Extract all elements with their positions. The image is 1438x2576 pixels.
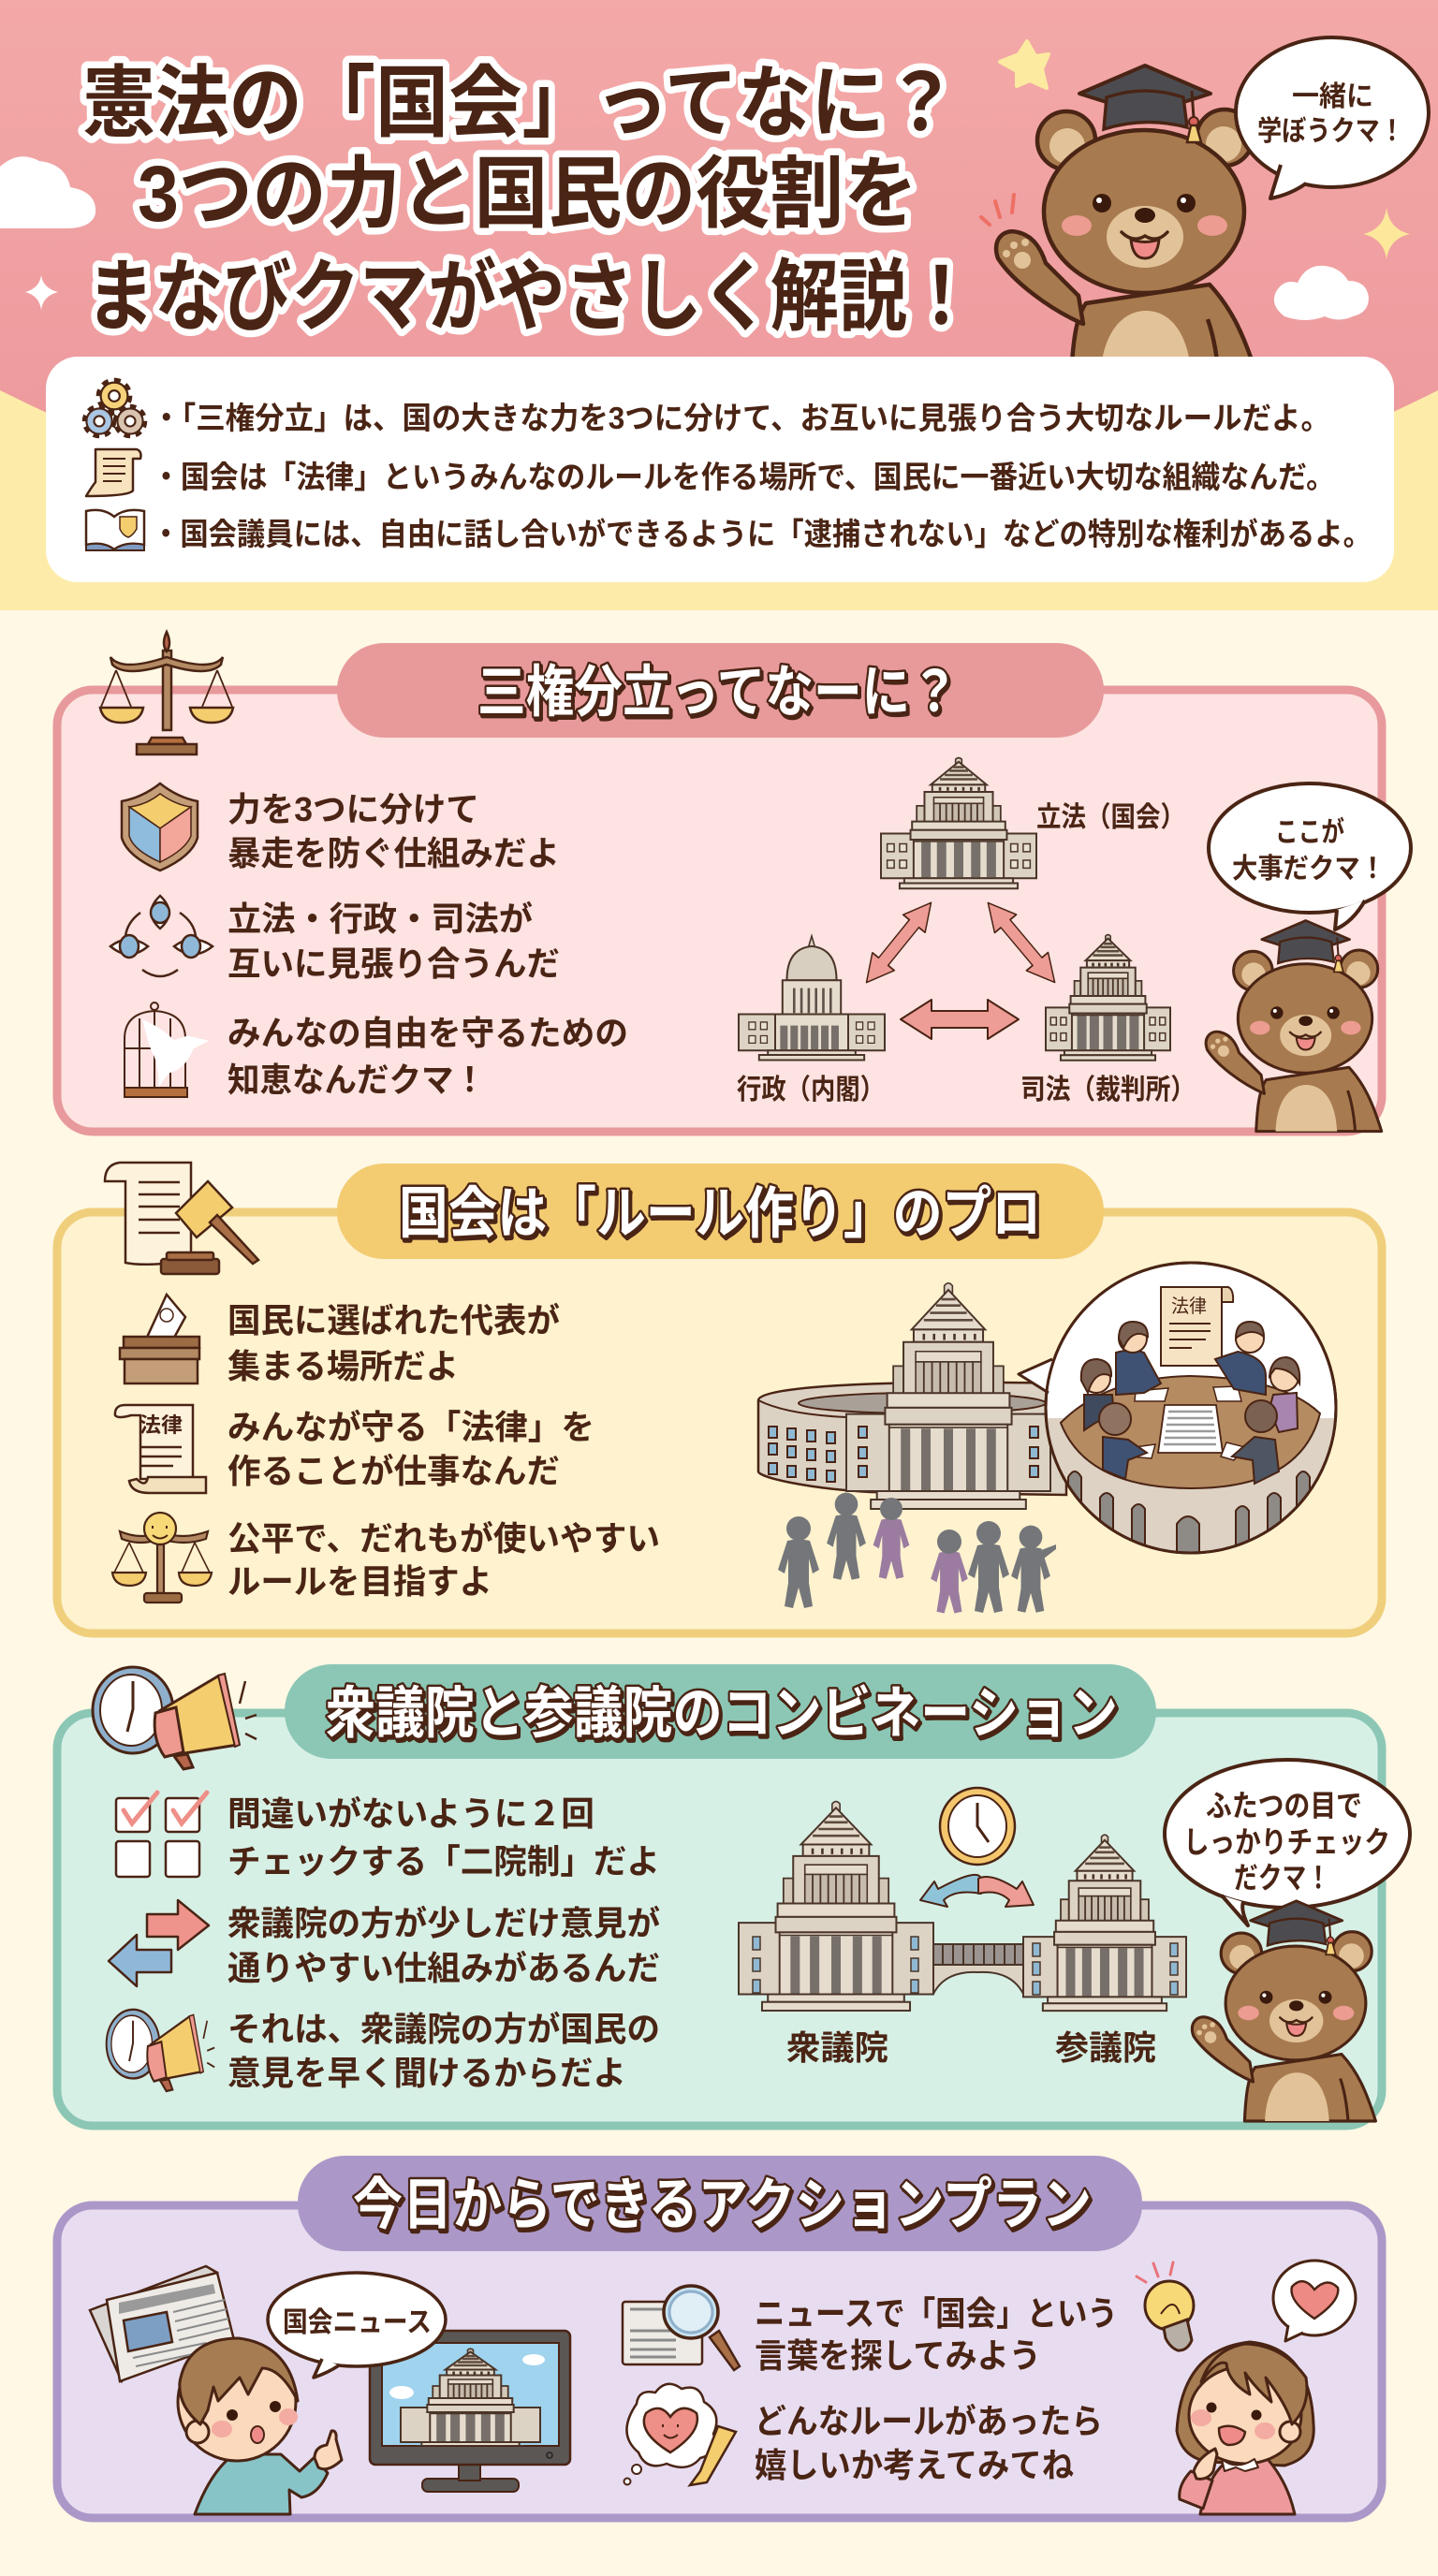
row text: それは、衆議院の方が国民の: [227, 2010, 660, 2048]
row text: 立法・行政・司法が: [227, 900, 533, 938]
icon: yellow sparkle: [1363, 208, 1410, 259]
row text: 集まる場所だよ: [227, 1347, 459, 1385]
row text: 嬉しいか考えてみてね: [755, 2446, 1074, 2484]
icon: book with shield: [86, 510, 144, 550]
illustration: diet building with rotunda: [758, 1283, 1066, 1509]
row text: 作ることが仕事なんだ: [227, 1452, 560, 1490]
icon: ballot box: [120, 1295, 199, 1383]
icon: scroll and gavel: [105, 1163, 258, 1274]
row text: ルールを目指すよ: [227, 1562, 492, 1601]
label: lower house: 衆議院: [786, 2028, 888, 2067]
label: cabinet: 行政（内閣）: [737, 1075, 885, 1105]
row text: 衆議院の方が少しだけ意見が: [227, 1904, 660, 1942]
character: boy: [178, 2338, 342, 2514]
icon: checkboxes: [116, 1793, 207, 1877]
building: legislature: [881, 758, 1036, 888]
heading pill: [337, 1164, 1104, 1259]
row text: 意見を早く聞けるからだよ: [227, 2054, 626, 2092]
row text: 力を3つに分けて: [227, 790, 479, 828]
illustration: meeting bubble: [1019, 1263, 1348, 1563]
arrow: cabinet to court: [901, 1000, 1019, 1039]
icon: exchange arrows: [109, 1900, 209, 1986]
illustration: monitor: [370, 2331, 570, 2492]
icon: newspaper: [90, 2266, 234, 2381]
icon: star: [1000, 41, 1049, 88]
row text: 互いに見張り合うんだ: [227, 944, 560, 983]
icon: heart thought with pencil: [624, 2384, 736, 2485]
speech bubble: two eyes: ふたつの目で: [1206, 1789, 1362, 1822]
row text: チェックする「二院制」だよ: [227, 1842, 660, 1881]
row text: 国民に選ばれた代表が: [227, 1301, 560, 1339]
row text: 知恵なんだクマ！: [227, 1061, 486, 1099]
arrow: curved exchange: [920, 1875, 1034, 1907]
row text: みんなの自由を守るための: [227, 1014, 628, 1052]
heading pill: [337, 643, 1104, 738]
speech bubble: header bear: [1236, 37, 1429, 198]
icon: clock and megaphone: [93, 1667, 257, 1769]
summary card: [46, 357, 1394, 582]
speech bubble: two eyes: [1165, 1760, 1410, 1925]
speech bubble: important: [1209, 783, 1411, 929]
icon: light bulb: [1137, 2262, 1194, 2350]
arrow: legislature to cabinet: [856, 894, 942, 991]
title: 憲法の「国会」ってなに？: [82, 59, 958, 147]
icon: scales: [100, 632, 233, 754]
heading pill: 三権分立ってなーに？: [477, 661, 959, 724]
illustration: citizens: [778, 1493, 1056, 1614]
heading pill: [285, 1664, 1156, 1759]
character: girl: [1177, 2342, 1313, 2514]
row text: 間違いがないように２回: [227, 1794, 594, 1833]
panel: rule making: [57, 1163, 1382, 1633]
icon: law scroll: 法律: [139, 1413, 183, 1437]
icon: right cloud: [1274, 266, 1369, 320]
row text: 通りやすい仕組みがあるんだ: [227, 1949, 660, 1987]
header band: [0, 0, 1438, 610]
heading pill: 衆議院と参議院のコンビネーション: [326, 1682, 1118, 1745]
arrow: legislature to court: [977, 894, 1065, 991]
label: court: 司法（裁判所）: [1020, 1075, 1196, 1105]
panel: separation of powers: [57, 632, 1411, 1132]
icon: left cloud: [0, 156, 95, 228]
icon: gears: [86, 382, 143, 434]
heading pill: 国会は「ルール作り」のプロ: [399, 1182, 1041, 1245]
speech bubble: two eyes: しっかりチェック: [1183, 1825, 1390, 1859]
row text: どんなルールがあったら: [755, 2402, 1103, 2440]
icon: shield: [122, 783, 198, 871]
title: まなびクマがやさしく解説！: [86, 253, 976, 341]
speech bubble: diet news: 国会ニュース: [283, 2307, 432, 2338]
label: legislature: 立法（国会）: [1036, 802, 1185, 833]
row text: 言葉を探してみよう: [755, 2336, 1041, 2375]
icon: scroll: [86, 449, 140, 496]
summary line 2: ・国会は「法律」というみんなのルールを作る場所で、国民に一番近い大切な組織なんだ。: [152, 460, 1335, 494]
icon: magnifier over news: [623, 2286, 740, 2370]
speech bubble: important: 大事だクマ！: [1232, 854, 1386, 885]
meeting participants: [1081, 1322, 1299, 1484]
icon: small clock and megaphone: [107, 2010, 214, 2091]
icon: white sparkle: [25, 275, 58, 310]
row text: ニュースで「国会」という: [755, 2294, 1118, 2333]
speech bubble: two eyes: だクマ！: [1234, 1861, 1330, 1895]
illustration: two houses with bridge: [739, 1802, 1186, 2011]
heading pill: [298, 2156, 1142, 2251]
summary line 1: ・「三権分立」は、国の大きな力を3つに分けて、お互いに見張り合う大切なルールだよ。: [152, 401, 1330, 435]
law scroll in bubble: 法律: [1171, 1295, 1207, 1317]
icon: smiling scales: [112, 1513, 212, 1603]
law scroll in bubble: [1161, 1287, 1233, 1366]
speech bubble: header bear: 一緒に: [1292, 81, 1373, 112]
icon: birdcage with dove: [125, 1003, 208, 1097]
title: 3つの力と国民の役割を: [138, 150, 917, 238]
document on table: [1127, 1386, 1245, 1460]
mascot: header bear: [981, 66, 1258, 380]
speech bubble: important: ここが: [1275, 816, 1344, 848]
speech bubble: header bear: 学ぼうクマ！: [1257, 116, 1404, 147]
icon: law scroll: [115, 1405, 206, 1493]
mascot: bear: [1192, 1901, 1375, 2121]
row text: みんなが守る「法律」を: [227, 1408, 594, 1446]
title: [82, 59, 976, 341]
heading pill: 今日からできるアクションプラン: [353, 2174, 1092, 2236]
mascot: bear: [1206, 920, 1382, 1132]
speech bubble: diet news: [268, 2273, 446, 2378]
building: cabinet: [739, 936, 885, 1060]
panel: bicameral system: [57, 1664, 1410, 2126]
row text: 公平で、だれもが使いやすい: [227, 1519, 660, 1558]
row text: 暴走を防ぐ仕組みだよ: [227, 834, 560, 872]
label: upper house: 参議院: [1055, 2028, 1156, 2067]
speech bubble: heart: [1273, 2261, 1356, 2341]
icon: watching eyes: [110, 896, 213, 976]
building: court: [1046, 935, 1170, 1061]
icon: clock: [940, 1788, 1015, 1865]
panel: action plan: [57, 2156, 1382, 2518]
